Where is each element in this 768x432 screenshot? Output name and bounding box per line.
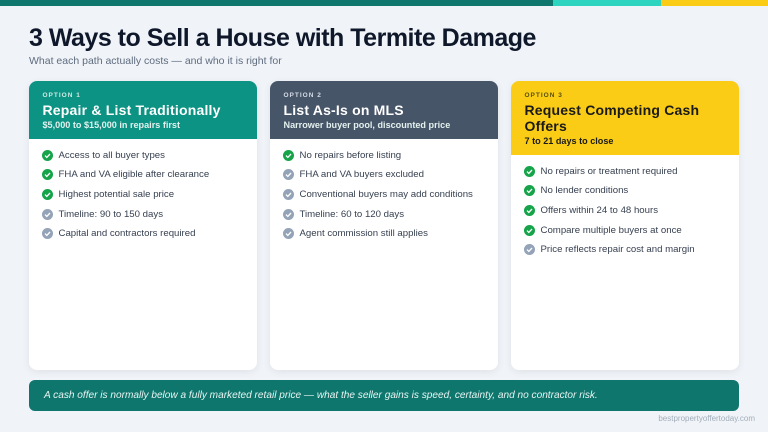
panel: option 2 <box>270 81 498 370</box>
item: timeline: Timeline: 60 to 120 days <box>300 208 404 220</box>
callout text: A cash offer is normally below a fully marketed retail price — what the seller gains is speed, certainty, and no contractor risk. <box>44 390 598 400</box>
item: capital: Capital and contractors required <box>58 228 195 239</box>
option 2 header <box>270 81 498 139</box>
option 1 header: OPTION 1 <box>42 92 81 98</box>
item: price: Highest potential sale price <box>58 189 174 200</box>
option 1 header: $5,000 to $15,000 in repairs first <box>42 120 180 130</box>
item: conventional: Conventional buyers may add conditions <box>300 189 473 200</box>
option 2 header: Narrower buyer pool, discounted price <box>284 120 450 130</box>
item: price: Price reflects repair cost and margin <box>540 244 695 255</box>
item: FHA: FHA and VA eligible after clearance <box>58 169 209 180</box>
callout <box>29 380 739 410</box>
option 3 header: Request Competing Cash Offers <box>524 102 699 134</box>
panel: option 3 <box>511 81 739 370</box>
top accent bar <box>0 0 768 6</box>
item: no repairs: No repairs before listing <box>300 150 401 160</box>
option 3 header: 7 to 21 days to close <box>524 136 613 146</box>
item: FHA excluded: FHA and VA buyers excluded <box>300 169 424 180</box>
item: access: Access to all buyer types <box>58 150 165 160</box>
item: offers: Offers within 24 to 48 hours <box>540 205 658 216</box>
item: compare: Compare multiple buyers at once <box>540 224 682 236</box>
panel: option 1 <box>29 81 257 370</box>
option 3 header: OPTION 3 <box>524 92 563 98</box>
item: timeline: Timeline: 90 to 150 days <box>58 208 163 220</box>
option 2 header: List As-Is on MLS <box>284 102 404 118</box>
subtitle: What each path actually costs — and who it is right for <box>29 54 282 66</box>
option 1 header: Repair & List Traditionally <box>42 102 221 118</box>
title: 3 Ways to Sell a House with Termite Damage <box>29 24 536 52</box>
item: commission: Agent commission still applies <box>300 228 428 239</box>
option 3 header <box>511 81 739 155</box>
option 2 header: OPTION 2 <box>284 92 322 98</box>
option 1 header <box>29 81 257 139</box>
source url: bestpropertyoffertoday.com <box>658 414 755 423</box>
item: lender: No lender conditions <box>540 185 628 196</box>
item: no repairs: No repairs or treatment required <box>540 166 677 176</box>
